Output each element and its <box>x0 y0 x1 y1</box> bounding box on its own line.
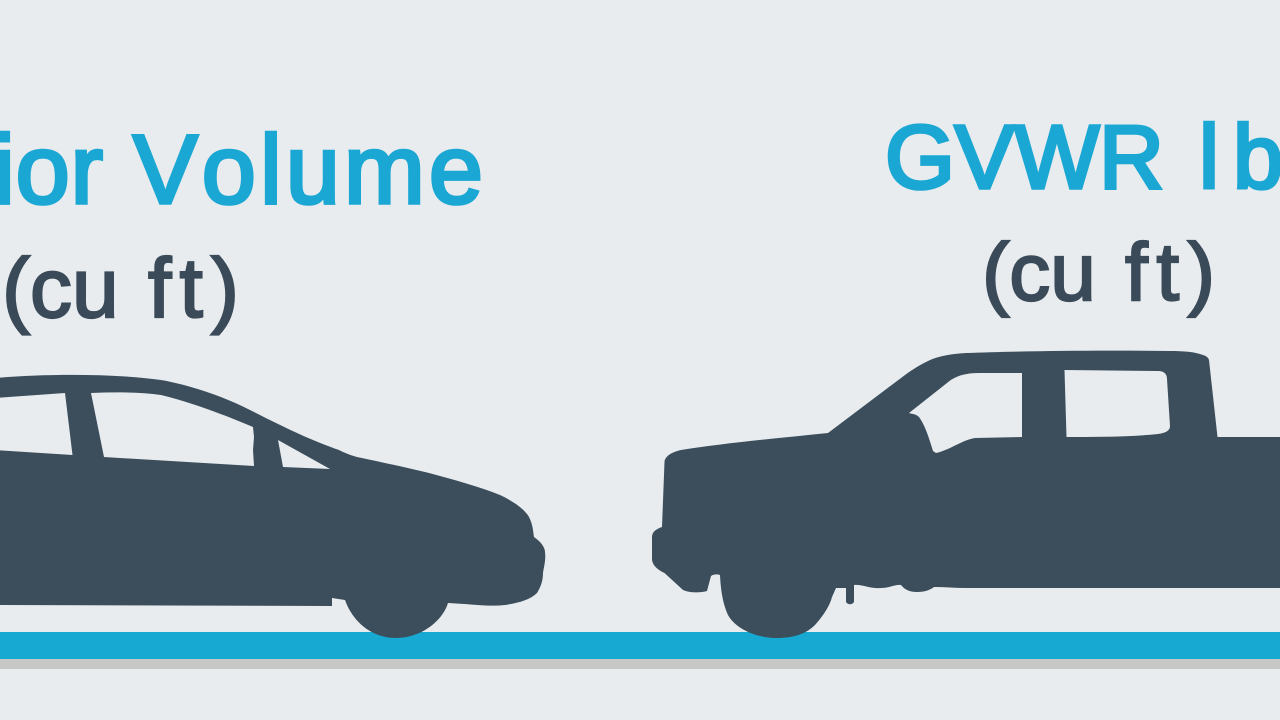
ground line <box>0 632 1280 669</box>
icon: pickup truck silhouette <box>652 351 1280 638</box>
unit label: right cu ft <box>982 227 1215 318</box>
heading: GVWR lb: GVWR <box>885 108 1164 208</box>
icon: sedan silhouette <box>0 375 545 638</box>
unit label: left cu ft <box>2 241 239 335</box>
unit label: right cu ft: ft) <box>1125 227 1215 318</box>
unit label: left cu ft: ft) <box>148 241 239 335</box>
unit label: right cu ft: (cu <box>982 227 1096 318</box>
heading: interior volume: Volume <box>133 115 483 224</box>
unit label: left cu ft: (cu <box>2 241 119 335</box>
